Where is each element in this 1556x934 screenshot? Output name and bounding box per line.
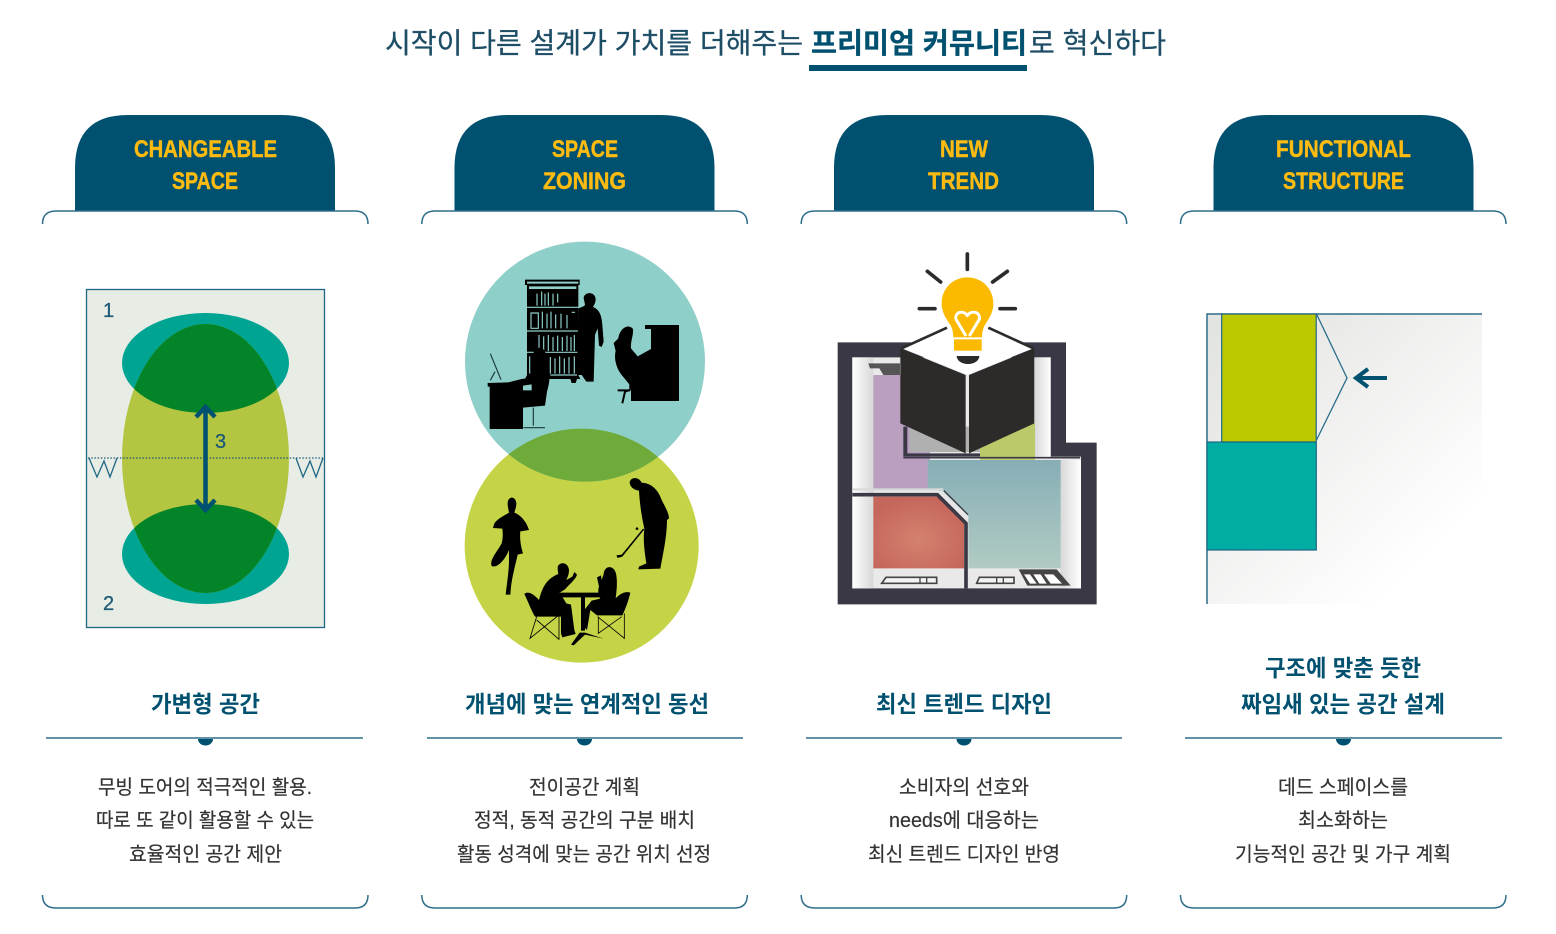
description: 최신 트렌드 디자인 반영 [868,843,1060,866]
description: 무빙 도어의 적극적인 활용. [98,776,312,799]
panel: space zoning: 개념에 맞는 연계적인 동선 [465,691,709,717]
tab: space zoning: ZONING [543,168,626,195]
floor plan [838,342,1097,604]
description: 활동 성격에 맞는 공간 위치 선정 [457,843,711,866]
description [1235,776,1451,866]
tab: changeable space: CHANGEABLE [134,136,277,163]
tab: new trend: NEW [940,136,989,163]
description: 전이공간 계획 [529,776,640,799]
description: 정적, 동적 공간의 구분 배치 [474,809,695,832]
description: 효율적인 공간 제안 [129,843,282,866]
diagram: variable space: 1 [103,300,114,322]
icon: office silhouettes [488,280,679,429]
diagram: built-in structure [1207,314,1482,604]
title: 시작이 다른 설계가 가치를 더해주는 [385,28,803,60]
diagram: two activity circles [465,242,705,663]
description: needs에 대응하는 [889,809,1039,832]
title: 프리미엄 커뮤니티 [811,28,1027,60]
tab: functional structure: STRUCTURE [1283,168,1404,195]
description: 데드 스페이스를 [1278,776,1408,799]
tab: changeable space: SPACE [172,168,238,195]
panel: functional structure [1180,115,1506,908]
icon: leisure silhouettes [491,478,669,645]
tab: functional structure: FUNCTIONAL [1276,136,1411,163]
title [385,28,1166,71]
diagram: variable space: 3 [215,431,226,453]
subheading: 구조에 맞춘 듯한 [1265,655,1421,681]
diagram: variable space [86,290,324,628]
panel: changeable space [42,115,368,908]
tab: new trend: TREND [928,168,999,195]
panel: new trend [801,115,1127,908]
icon: light bulb [919,254,1015,364]
panel: changeable space: 가변형 공간 [151,691,260,717]
tab: new trend [834,115,1094,211]
panel: new trend: 최신 트렌드 디자인 [876,691,1052,717]
diagram: variable space: 2 [103,593,114,615]
description: 따로 또 같이 활용할 수 있는 [96,809,314,832]
subheading [1241,655,1445,717]
panel: space zoning [422,115,747,908]
tab: functional structure [1214,115,1474,211]
tab: changeable space [75,115,335,211]
description [868,776,1060,866]
tab: space zoning [454,115,714,211]
description: 소비자의 선호와 [899,776,1029,799]
title: 로 혁신하다 [1029,28,1166,60]
description [457,776,711,866]
description [96,776,314,866]
diagram: floor plan with light bulb [838,254,1097,604]
tab: space zoning: SPACE [552,136,618,163]
description: 최소화하는 [1298,809,1388,832]
icon: open box [900,328,1034,453]
description: 기능적인 공간 및 가구 계획 [1235,843,1451,866]
subheading: 짜임새 있는 공간 설계 [1241,691,1445,717]
